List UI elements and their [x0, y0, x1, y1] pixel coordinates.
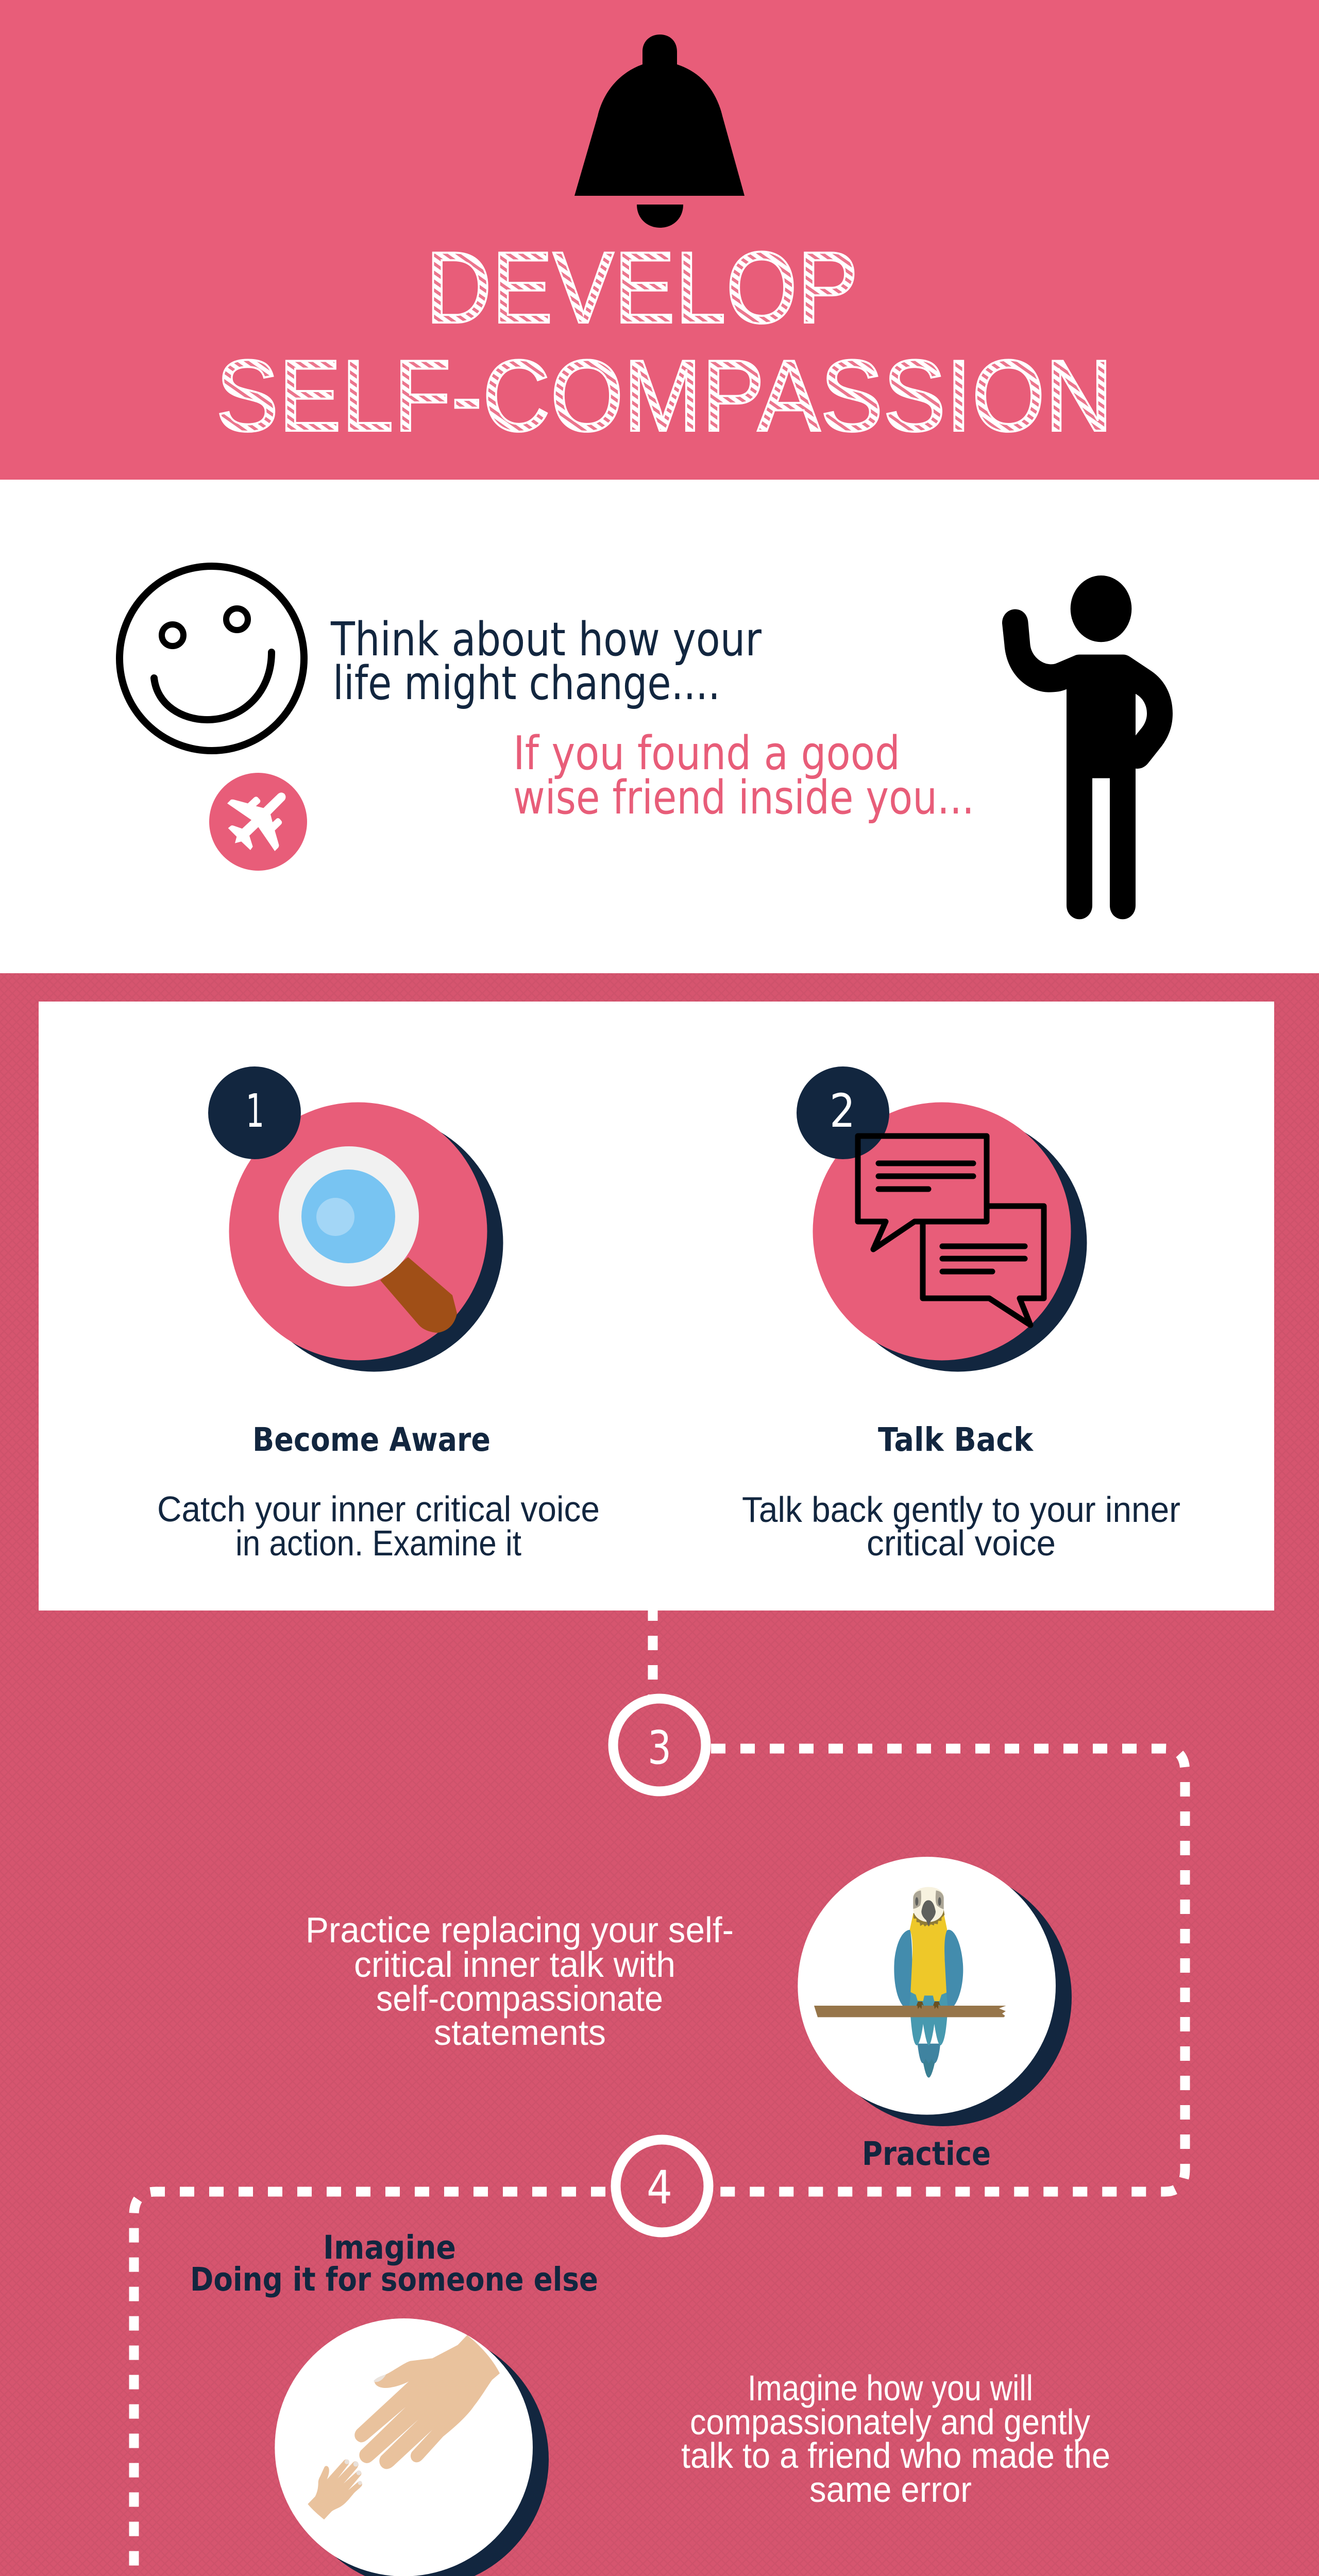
step 4: heading — [190, 2229, 598, 2298]
connector: card to step 3 — [648, 1611, 657, 1695]
step 4: description: talk to a friend who made the — [681, 2435, 1110, 2476]
icon: waving person — [1002, 575, 1173, 919]
step 1: heading: Become Aware — [252, 1421, 491, 1459]
step 2: description: Talk back gently to your inner — [742, 1489, 1180, 1530]
step 4: heading: Imagine — [323, 2229, 456, 2266]
connector: step 3 to step 4 — [711, 1749, 1185, 2192]
intro panel — [0, 480, 1319, 973]
step 3: heading: Practice — [862, 2135, 991, 2173]
step 4 number ring: 4 — [647, 2161, 672, 2214]
panel: steps 1 and 2 card — [39, 1002, 1274, 1611]
icon: bell — [574, 35, 745, 228]
step 3: description: statements — [434, 2012, 606, 2053]
step 4: description: same error — [809, 2469, 972, 2510]
step 1: description: Catch your inner critical voice — [157, 1489, 600, 1529]
step 1: description — [157, 1489, 600, 1563]
title: DEVELOP — [426, 231, 858, 344]
text: wise friend: If you found a good — [513, 726, 900, 781]
step 3: description: self-compassionate — [376, 1978, 663, 2019]
icon: airplane badge — [209, 773, 307, 871]
step 3 number ring: 3 — [648, 1721, 671, 1774]
header panel — [0, 0, 1319, 480]
step 3: parrot icon — [798, 1857, 1072, 2126]
step 2: description: critical voice — [867, 1523, 1056, 1563]
step 3 number ring — [613, 1699, 706, 1791]
step 2: talk back icon: 2 — [830, 1084, 855, 1138]
text: think about: Think about how your — [330, 613, 762, 667]
step 4: hands icon — [275, 2318, 549, 2576]
steps background — [0, 973, 1319, 2576]
step 4: heading: Doing it for someone else — [190, 2261, 598, 2298]
step 3: description — [306, 1910, 734, 2053]
step 4 number ring — [616, 2140, 708, 2232]
step 4: description — [681, 2368, 1110, 2510]
title: SELF-COMPASSION — [216, 339, 1113, 452]
step 2: heading: Talk Back — [878, 1421, 1034, 1459]
step 3: description: critical inner talk with — [354, 1944, 675, 1985]
step 4: description: Imagine how you will — [748, 2368, 1033, 2408]
title — [216, 231, 1113, 452]
step 2: talk back icon — [797, 1066, 1087, 1371]
text: wise friend: wise friend inside you... — [513, 771, 974, 825]
step 1: become aware icon: 1 — [246, 1084, 264, 1138]
step 1: become aware icon — [208, 1066, 503, 1371]
text: think about — [330, 613, 762, 710]
connector: step 4 to step 5 — [134, 2192, 614, 2576]
step 3: description: Practice replacing your self- — [306, 1910, 734, 1950]
text: think about: life might change.... — [333, 656, 720, 710]
step 4: description: compassionately and gently — [690, 2402, 1090, 2442]
step 2: description — [742, 1489, 1180, 1563]
icon: smiley face — [120, 566, 304, 751]
step 1: description: in action. Examine it — [235, 1523, 521, 1563]
text: wise friend — [513, 726, 974, 825]
